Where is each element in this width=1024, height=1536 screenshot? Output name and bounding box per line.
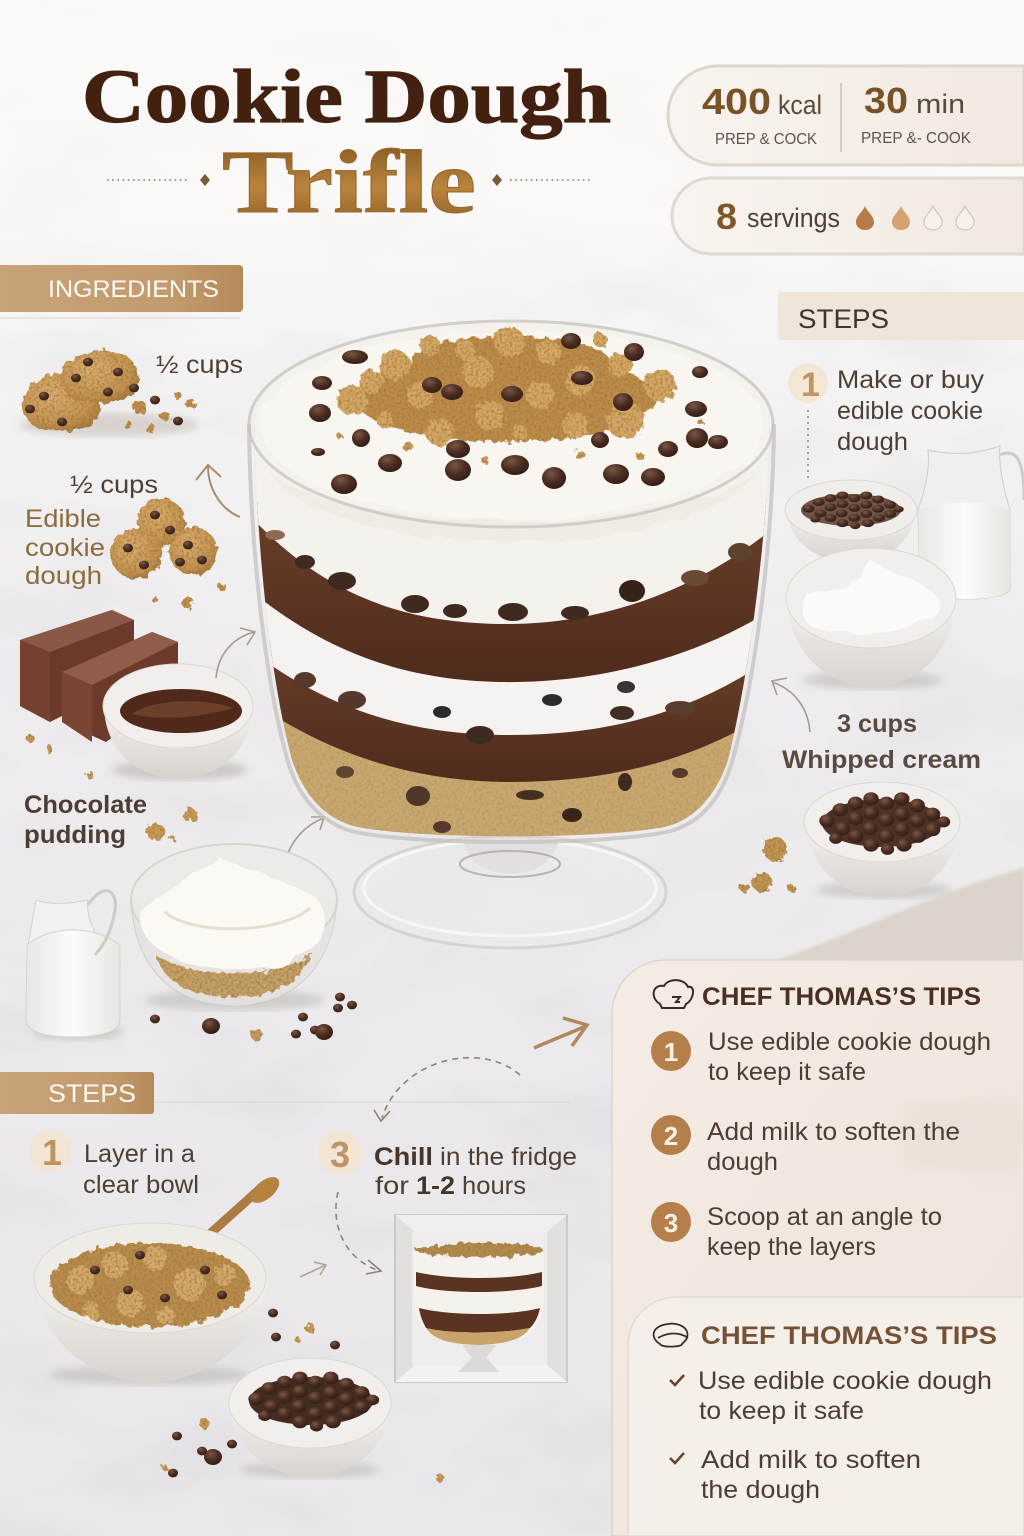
stats pill: calories and time: PREP &- COOK bbox=[861, 130, 971, 147]
step 3 chill in the fridge: Chill bbox=[374, 1143, 433, 1171]
tip 2: 2 bbox=[664, 1121, 678, 1151]
label: edible cookie dough: cookie bbox=[25, 534, 105, 562]
step 1 badge top right bbox=[788, 363, 828, 482]
top-right steps banner: STEPS bbox=[798, 304, 889, 334]
small bowl of chocolate chips bbox=[229, 1358, 391, 1478]
step 1 text top right: dough bbox=[837, 428, 908, 456]
label: chocolate pudding: pudding bbox=[24, 821, 126, 849]
panel: chef tips numbered: CHEF THOMAS’S TIPS bbox=[702, 983, 981, 1011]
bottom steps banner: STEPS bbox=[48, 1080, 136, 1108]
arrow to trifle from pudding bbox=[216, 628, 255, 678]
step 1 text top right: edible cookie bbox=[837, 397, 983, 425]
label: whipped cream: 3 cups bbox=[837, 710, 917, 738]
trifle bowl body and layers bbox=[240, 310, 780, 850]
label: chocolate pudding: Chocolate bbox=[24, 791, 147, 819]
step 3 chill in the fridge: in the fridge bbox=[440, 1143, 577, 1171]
tip 3 bbox=[651, 1202, 942, 1261]
label: chocolate pudding bbox=[24, 791, 147, 849]
stats pill: calories and time: 400 bbox=[702, 81, 771, 122]
label: whipped cream bbox=[782, 710, 981, 774]
servings pill: 8 bbox=[716, 196, 737, 237]
step 3 chill in the fridge: for bbox=[375, 1172, 409, 1200]
step 3 chill in the fridge bbox=[318, 1131, 577, 1200]
ingredient: cookie dough balls bbox=[111, 498, 226, 608]
label: edible cookie dough: Edible bbox=[25, 505, 101, 533]
label: whipped cream: Whipped cream bbox=[782, 746, 981, 774]
tip 3: keep the layers bbox=[707, 1233, 876, 1261]
top-right steps banner bbox=[778, 292, 1024, 340]
checklist tip 1: to keep it safe bbox=[699, 1397, 864, 1425]
ingredients banner bbox=[0, 265, 243, 312]
crumbs near label bbox=[26, 734, 197, 841]
mixing bowl with cookie dough bbox=[34, 1172, 284, 1385]
tip 1: 1 bbox=[664, 1037, 678, 1067]
step 3 chill in the fridge: 3 bbox=[330, 1134, 350, 1175]
panel: chef tips checklist: CHEF THOMAS’S TIPS bbox=[701, 1322, 997, 1350]
stats pill: calories and time: 30 bbox=[864, 80, 908, 121]
icon: chef hat outline bbox=[654, 1324, 688, 1347]
arrow to trifle from cream bbox=[288, 817, 324, 853]
step 1 layer in a clear bowl: Layer in a bbox=[84, 1140, 195, 1168]
title: Cookie Dough bbox=[82, 55, 611, 139]
bottom steps banner bbox=[0, 1072, 154, 1114]
title: Trifle bbox=[222, 133, 476, 232]
stats pill: calories and time: PREP & COCK bbox=[715, 131, 817, 148]
servings pill: servings bbox=[747, 203, 840, 233]
ingredient: glass bowl of cream bbox=[131, 844, 337, 1010]
checklist tip 2 bbox=[670, 1446, 921, 1504]
trifle inner chips and crumbs bbox=[265, 530, 752, 833]
dashed arrows bbox=[300, 1058, 520, 1277]
panel: chef tips checklist bbox=[628, 1297, 1024, 1536]
ingredient: milk jug right bbox=[918, 446, 1024, 599]
tip 3: Scoop at an angle to bbox=[707, 1203, 942, 1231]
checklist tip 2: the dough bbox=[701, 1476, 820, 1504]
checklist tip 2: Add milk to soften bbox=[701, 1446, 921, 1474]
step 3 chill in the fridge: hours bbox=[462, 1172, 526, 1200]
tip 1: Use edible cookie dough bbox=[708, 1028, 991, 1056]
title bbox=[82, 55, 611, 232]
stats pill: calories and time: kcal bbox=[778, 90, 822, 120]
stats pill: calories and time bbox=[668, 66, 1024, 165]
step 1 layer in a clear bowl bbox=[29, 1130, 199, 1199]
step 3 chill in the fridge: 1-2 bbox=[416, 1172, 455, 1200]
glass trifle bowl bbox=[240, 310, 780, 948]
arrow to trifle from cookies bbox=[196, 465, 240, 517]
ingredient: pudding bowl bbox=[103, 664, 253, 780]
servings pill bbox=[672, 178, 1024, 254]
label: first ingredient amount: ½ cups bbox=[156, 351, 243, 379]
checklist tip 1 bbox=[670, 1367, 992, 1425]
glass rim bbox=[249, 321, 774, 842]
ingredient: chocolate blocks bbox=[20, 610, 178, 742]
tip 2: dough bbox=[707, 1148, 778, 1176]
panel: chef tips numbered bbox=[612, 960, 1024, 1536]
ingredient: whipped cream bowl bbox=[786, 548, 957, 689]
tip 2 bbox=[651, 1115, 960, 1176]
trifle top cream surface bbox=[260, 331, 764, 542]
ingredients banner: INGREDIENTS bbox=[48, 276, 219, 303]
checklist tip 1: Use edible cookie dough bbox=[698, 1367, 992, 1395]
arrow from whipped cream to trifle bbox=[772, 678, 810, 732]
stats pill: calories and time: min bbox=[916, 89, 965, 119]
icon: chef hat bbox=[654, 980, 693, 1008]
tip 2: Add milk to soften the bbox=[707, 1118, 960, 1146]
step 1 layer in a clear bowl: 1 bbox=[42, 1132, 62, 1173]
label: edible cookie dough: dough bbox=[25, 562, 102, 590]
step 1 text top right: Make or buy bbox=[837, 366, 985, 394]
ingredient: chips bowl right bbox=[804, 782, 960, 898]
cookie crumble topping bbox=[309, 327, 728, 494]
scattered chips lower left bbox=[150, 993, 357, 1041]
linen cloth bbox=[770, 868, 1024, 965]
label: edible cookie dough: ½ cups bbox=[70, 471, 158, 499]
scattered crumbs and chips bottom bbox=[162, 1309, 444, 1482]
crumbs by chips bowl bbox=[740, 837, 796, 893]
step 1 badge top right: 1 bbox=[801, 366, 820, 404]
step 1 layer in a clear bowl: clear bowl bbox=[83, 1171, 199, 1199]
step 1 text top right bbox=[837, 366, 985, 456]
label: edible cookie dough bbox=[25, 471, 158, 590]
tip 3: 3 bbox=[664, 1208, 678, 1238]
tip 1 bbox=[651, 1028, 991, 1086]
ingredient: small bowl of chips bbox=[785, 480, 917, 562]
arrow to tips panel bbox=[534, 1018, 587, 1048]
mini trifle in fridge bbox=[395, 1215, 567, 1382]
ingredient: milk jug left bbox=[26, 891, 124, 1040]
ingredient: cookies bbox=[20, 351, 200, 437]
tip 1: to keep it safe bbox=[708, 1058, 866, 1086]
trifle pedestal bbox=[354, 836, 666, 948]
